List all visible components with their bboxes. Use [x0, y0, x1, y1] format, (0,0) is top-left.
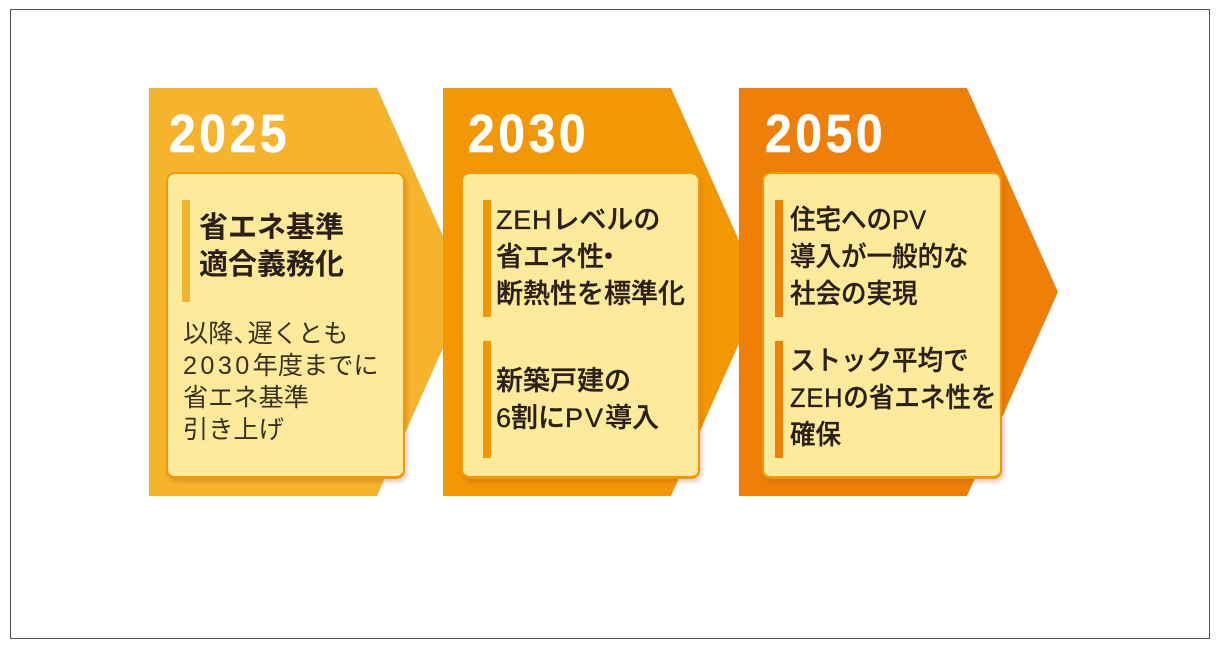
body text: 以降: 2030年度までに [183, 352, 379, 380]
heading text: 省エネ基準適合義務化: 省エネ基準 [199, 212, 344, 244]
text: 新築戸建の6割にPV導入: 6割にPV導入 [496, 403, 659, 433]
panel: 2025 card [166, 172, 405, 479]
arrow: 2050 [739, 88, 1058, 496]
text: ストック平均: 確保 [790, 420, 841, 450]
heading text: 省エネ基準適合義務化 [199, 212, 344, 281]
arrow: 2030 [443, 88, 762, 496]
text: 住宅へのPV導入 [790, 205, 969, 309]
text: 住宅へのPV導入: 住宅へのPV [790, 205, 926, 235]
accent bar [483, 341, 491, 458]
text: ストック平均: ストック平均で [790, 346, 969, 376]
accent bar [182, 200, 190, 302]
text: ストック平均 [790, 346, 996, 450]
heading text: 省エネ基準適合義務化: 適合義務化 [199, 249, 344, 281]
heading: 2030: 2030 [468, 104, 589, 164]
heading: 2025: 2025 [169, 104, 290, 164]
text: ZEHレベルの省エネ性・断熱性を標準化: ZEHレベルの [496, 205, 660, 235]
text: 新築戸建の6割にPV導入: 新築戸建の [496, 366, 631, 396]
text: ストック平均: ZEHの省エネ性を [790, 383, 996, 413]
text: ZEHレベルの省エネ性・断熱性を標準化 [496, 205, 685, 309]
accent bar [775, 341, 783, 458]
body text: 以降: 以降、遅くとも [183, 320, 348, 348]
text: ZEHレベルの省エネ性・断熱性を標準化: 省エネ性・ [496, 242, 622, 272]
text: 住宅へのPV導入: 社会の実現 [790, 279, 918, 309]
body text: 以降: 引き上げ [183, 416, 284, 444]
text: 新築戸建の6割にPV導入 [496, 366, 659, 433]
panel: 2030 card [461, 172, 700, 479]
panel: 2050 card [762, 172, 1002, 479]
accent bar [775, 200, 783, 317]
text: ZEHレベルの省エネ性・断熱性を標準化: 断熱性を標準化 [496, 279, 685, 309]
arrow: 2025 [149, 88, 468, 496]
heading: 2050: 2050 [765, 104, 886, 164]
body text: 以降: 省エネ基準 [183, 384, 309, 412]
text: 住宅へのPV導入: 導入が一般的な [790, 242, 969, 272]
accent bar [483, 200, 491, 317]
body text: 以降 [183, 320, 379, 444]
